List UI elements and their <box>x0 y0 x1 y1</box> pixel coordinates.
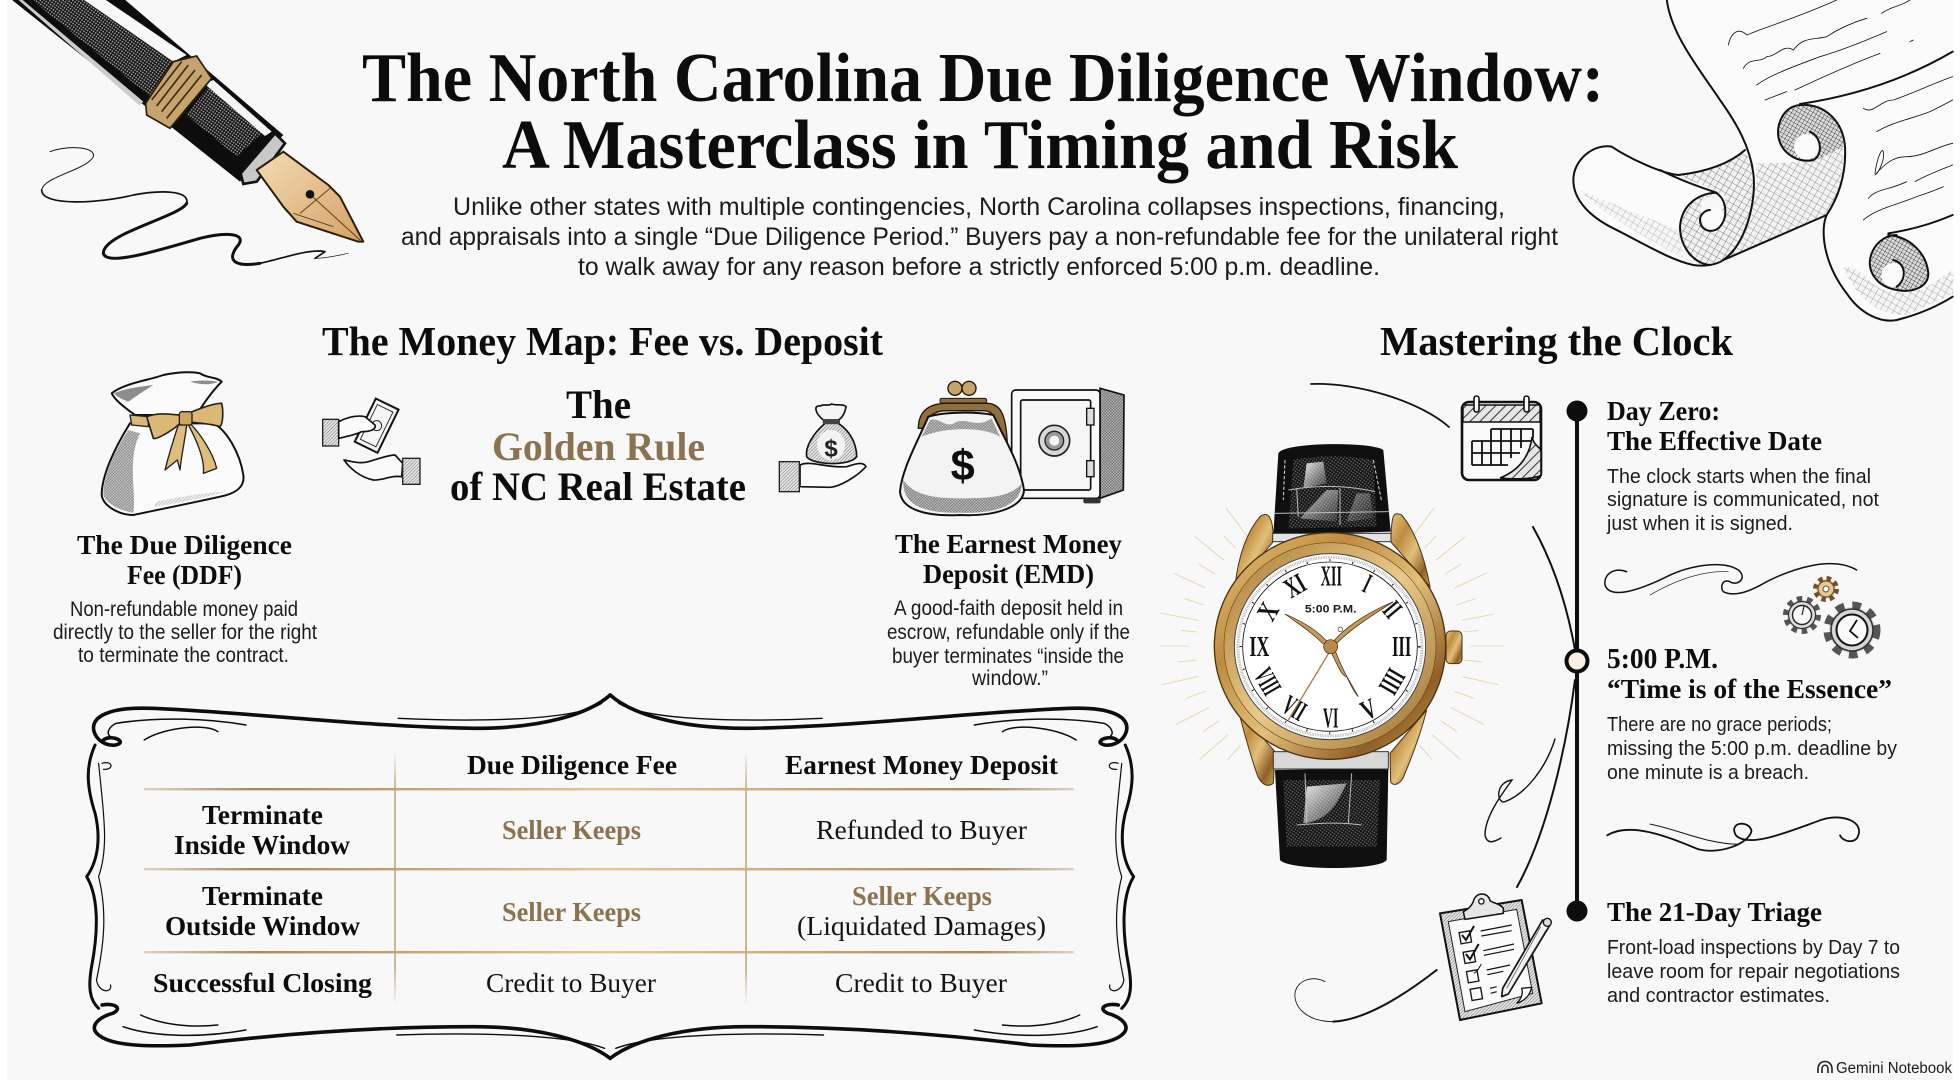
timeline step: 21-day triage: The 21-Day Triage <box>1607 897 1822 927</box>
roman numerals: II <box>1376 596 1408 625</box>
sun rays <box>1160 508 1504 759</box>
illustration: parchment scroll <box>1573 0 1953 321</box>
subtitle text block: to walk away for any reason before a strictly enforced 5:00 p.m. deadline. <box>578 253 1380 281</box>
illustration: fountain pen with ink squiggle <box>10 0 363 264</box>
timeline step: day zero: signature is communicated, not <box>1607 489 1879 511</box>
row: terminate inside window: Inside Window <box>174 830 351 860</box>
subtitle text block <box>401 193 1558 281</box>
roman numerals: VI <box>1323 703 1338 734</box>
flourish divider: upper <box>1605 564 1857 595</box>
timeline step: 21-day triage: Front-load inspections by Day 7 to <box>1607 937 1900 959</box>
row: terminate inside window: Refunded to Buyer <box>816 815 1027 845</box>
heading: earnest money deposit: The Earnest Money <box>895 529 1122 559</box>
row: successful closing: Credit to Buyer <box>835 968 1007 998</box>
icon: hand holding money bag <box>779 404 866 492</box>
row: terminate inside window <box>174 800 1027 860</box>
row: terminate inside window: Terminate <box>202 800 323 830</box>
text: fee description: directly to the seller for the right <box>53 621 317 644</box>
roman numerals: VII <box>1277 690 1311 728</box>
text: deposit description: buyer terminates “inside the <box>892 645 1124 668</box>
panel: due diligence fee <box>53 372 317 667</box>
timeline step: day zero: The clock starts when the final <box>1607 466 1871 488</box>
row: successful closing: Successful Closing <box>153 968 373 998</box>
heading: due diligence fee: The Due Diligence <box>77 530 292 560</box>
golden rule heading: Golden Rule <box>492 424 705 469</box>
roman numerals: VIII <box>1247 663 1287 701</box>
table grid lines <box>144 750 1074 1005</box>
text: deposit description <box>887 597 1130 690</box>
dial label 5:00 p.m.: 5:00 P.M. <box>1305 603 1357 615</box>
row: terminate outside window: Outside Window <box>165 911 361 941</box>
timeline step: 21-day triage <box>1607 897 1900 1007</box>
roman numerals: I <box>1358 569 1376 599</box>
row: terminate outside window <box>165 881 1046 941</box>
text: fee description: to terminate the contract. <box>78 644 289 667</box>
icon: clock gears <box>1787 580 1875 653</box>
icon: clipboard with checklist and pencil <box>1440 894 1551 1020</box>
icon: hand holding money bag: $ <box>824 436 838 463</box>
row: successful closing <box>153 968 1007 998</box>
column headers <box>467 750 1058 780</box>
golden rule heading <box>450 382 746 509</box>
watch hands <box>1285 602 1393 720</box>
text: deposit description: escrow, refundable only if the <box>887 621 1130 644</box>
row: terminate outside window: Seller Keeps <box>852 881 992 911</box>
timeline step: 5:00 pm <box>1607 644 1897 784</box>
subtitle text block: and appraisals into a single “Due Diligence Period.” Buyers pay a non-refundable fee for the unilateral right <box>401 223 1558 251</box>
timeline step: 5:00 pm: one minute is a breach. <box>1607 762 1809 784</box>
roman numerals: IX <box>1249 632 1270 663</box>
heading: money map: The Money Map: Fee vs. Deposit <box>322 318 883 364</box>
timeline step: 5:00 pm: missing the 5:00 p.m. deadline by <box>1607 738 1897 760</box>
heading: due diligence fee <box>77 530 292 590</box>
dial <box>1234 554 1426 740</box>
timeline step: 5:00 pm: “Time is of the Essence” <box>1607 674 1892 704</box>
heading: mastering the clock: Mastering the Clock <box>1380 318 1733 364</box>
icon: tied money bag <box>102 372 244 515</box>
timeline node: 21-day triage <box>1566 900 1588 922</box>
timeline node: 5:00 pm <box>1566 650 1588 672</box>
timeline step: day zero: just when it is signed. <box>1606 513 1793 535</box>
timeline node: day zero <box>1566 400 1588 422</box>
timeline step: 5:00 pm: There are no grace periods; <box>1607 714 1832 736</box>
text: fee description <box>53 598 317 667</box>
panel: comparison table with ornate frame <box>87 695 1134 1058</box>
case lugs <box>1235 514 1430 785</box>
roman numerals: XII <box>1321 561 1342 592</box>
subtitle text block: Unlike other states with multiple contingencies, North Carolina collapses inspections, financing, <box>453 193 1505 221</box>
text: deposit description: window.” <box>971 667 1048 690</box>
timeline step: day zero: The Effective Date <box>1607 426 1822 456</box>
timeline step: day zero <box>1606 396 1879 535</box>
bottom strap <box>1275 768 1388 868</box>
crown <box>1446 631 1462 664</box>
row: terminate outside window: Seller Keeps <box>502 897 641 927</box>
timeline step: day zero: Day Zero: <box>1607 396 1720 426</box>
timeline step: 21-day triage: leave room for repair negotiations <box>1607 961 1900 983</box>
text: deposit description: A good-faith deposit held in <box>894 597 1123 620</box>
column headers: Due Diligence Fee <box>467 750 677 780</box>
golden rule heading: The <box>566 382 631 427</box>
heading: due diligence fee: Fee (DDF) <box>127 560 242 590</box>
panel: earnest money deposit <box>887 381 1130 690</box>
title: A Masterclass in Timing and Risk <box>502 107 1458 184</box>
roman numerals: XI <box>1279 568 1312 605</box>
icon: hands exchanging cash <box>323 399 420 484</box>
row: terminate outside window: (Liquidated Damages) <box>797 911 1046 941</box>
icon: calendar <box>1462 396 1541 480</box>
column headers: Earnest Money Deposit <box>785 750 1058 780</box>
top strap <box>1273 444 1391 535</box>
timeline spine <box>1566 400 1588 922</box>
heading: earnest money deposit: Deposit (EMD) <box>923 559 1094 589</box>
roman numerals: IIII <box>1373 664 1412 700</box>
icon: coin purse and safe <box>900 381 1124 515</box>
icon: coin purse and safe: $ <box>951 443 975 491</box>
roman numerals: X <box>1252 597 1286 626</box>
row: terminate inside window: Seller Keeps <box>502 815 641 845</box>
roman numerals: III <box>1392 632 1411 663</box>
swash arcs around the watch <box>1311 384 1575 887</box>
roman numerals: V <box>1356 693 1382 727</box>
timeline step: 5:00 pm: 5:00 P.M. <box>1607 644 1718 675</box>
golden rule heading: of NC Real Estate <box>450 464 746 509</box>
illustration: gold wristwatch <box>1160 444 1504 868</box>
timeline step: 21-day triage: and contractor estimates. <box>1607 985 1830 1007</box>
swash arc near clipboard <box>1295 970 1437 1022</box>
roman numerals <box>1247 561 1412 734</box>
flourish divider: lower <box>1607 817 1859 851</box>
row: terminate outside window: Terminate <box>202 881 323 911</box>
row: successful closing: Credit to Buyer <box>486 968 656 998</box>
title <box>362 40 1604 184</box>
text: fee description: Non-refundable money paid <box>70 598 298 621</box>
case and bezel <box>1214 533 1446 759</box>
heading: earnest money deposit <box>895 529 1122 589</box>
badge: gemini notebook: Gemini Notebook <box>1836 1060 1952 1077</box>
ornate frame <box>87 695 1134 1058</box>
title: The North Carolina Due Diligence Window: <box>362 40 1604 117</box>
